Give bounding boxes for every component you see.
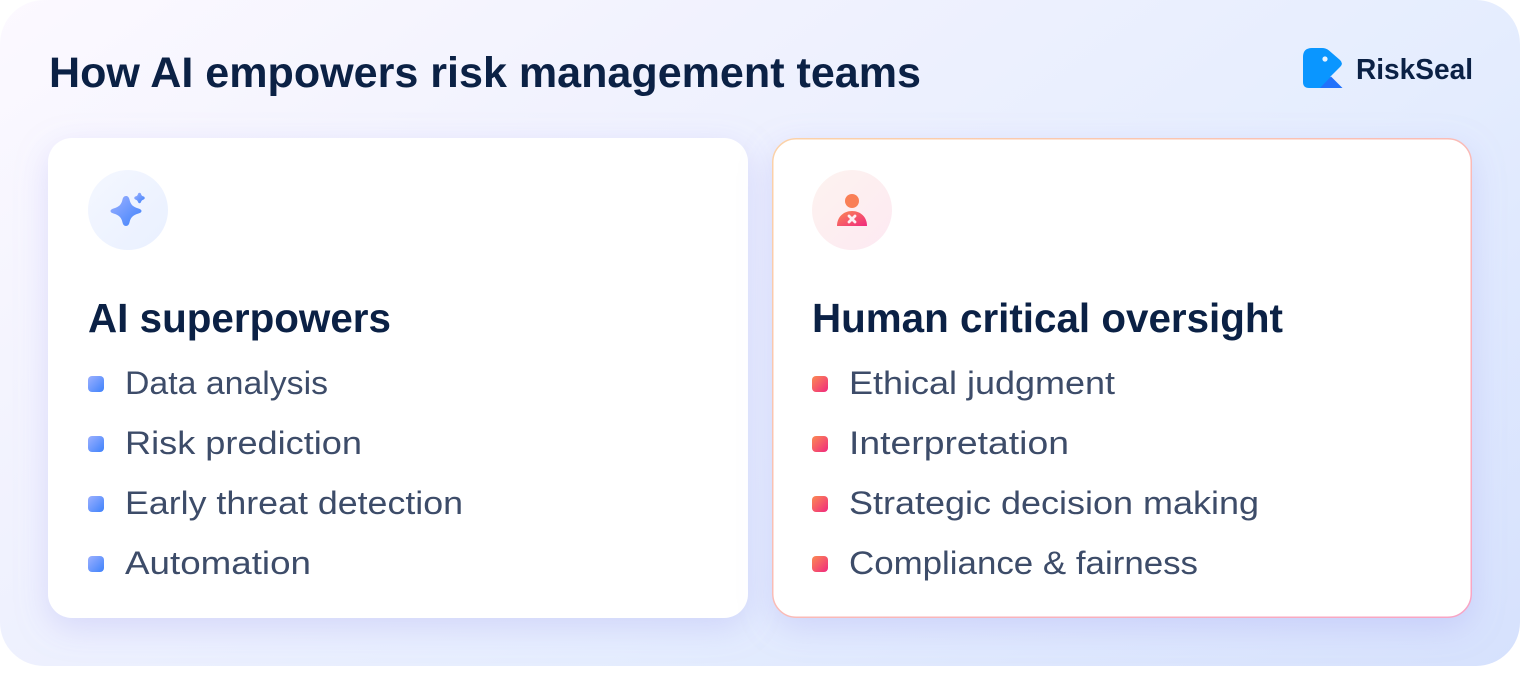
- panel: Human critical oversight: [773, 139, 1471, 617]
- panel: AI superpowers: [48, 138, 748, 618]
- list item: Automation: Automation: [125, 545, 311, 581]
- list item: Early threat detection: Early threat detection: [125, 485, 463, 521]
- heading: AI superpowers: [88, 295, 391, 341]
- logo wordmark: RiskSeal: [1356, 54, 1473, 86]
- list item: Data analysis: Data analysis: [125, 365, 328, 401]
- list item: Risk prediction: Risk prediction: [125, 425, 362, 461]
- logo: RiskSeal: [1303, 48, 1473, 88]
- icon: sparkles: [88, 170, 168, 250]
- heading: Human critical oversight: [812, 295, 1283, 341]
- list item: Ethical judgment: Ethical judgment: [849, 365, 1115, 401]
- list item: Interpretation: Interpretation: [849, 425, 1069, 461]
- icon: seal logo: [1303, 48, 1342, 88]
- title: How AI empowers risk management teams: [49, 49, 921, 97]
- icon: person with x: [812, 170, 892, 250]
- card background: [773, 139, 1471, 617]
- list item: Strategic decision making: Strategic decision making: [849, 485, 1259, 521]
- list item: Compliance & fairness: Compliance & fairness: [849, 545, 1198, 581]
- card background: [48, 138, 748, 618]
